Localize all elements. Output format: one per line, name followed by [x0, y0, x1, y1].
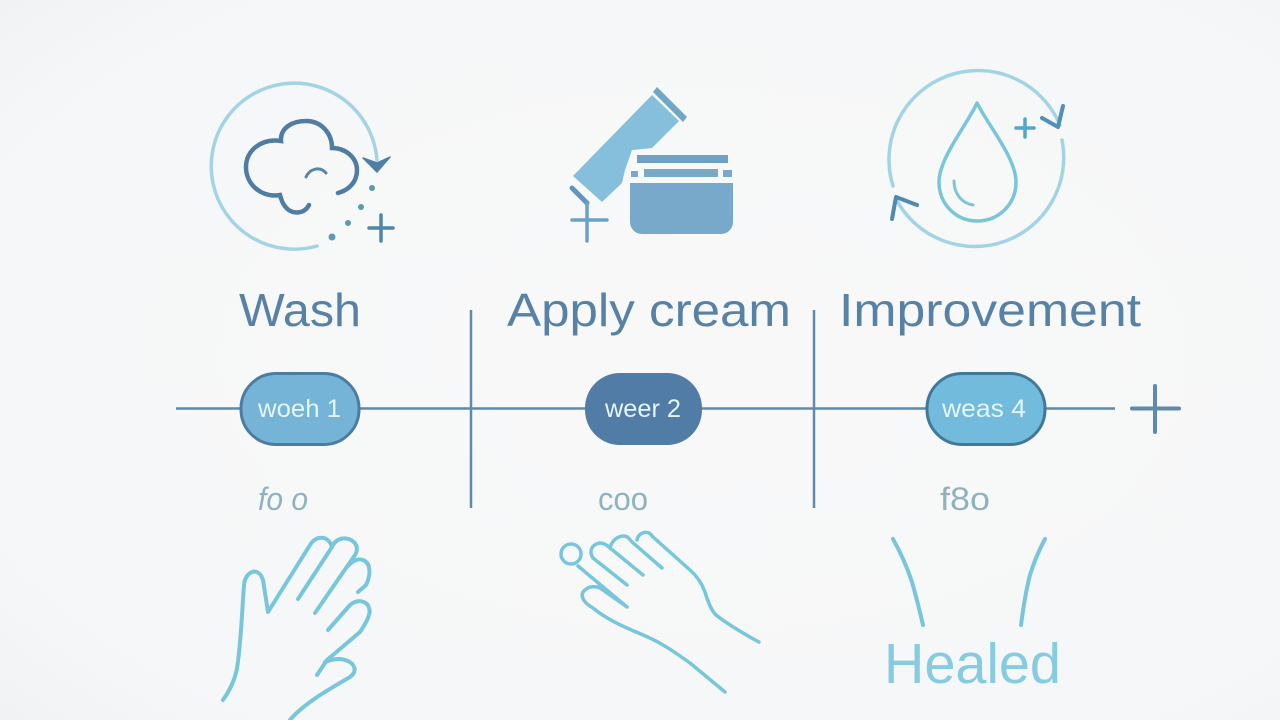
icon: wash cloud with circular arrow — [211, 83, 393, 249]
end plus sign — [1132, 386, 1179, 432]
week 2 pill — [585, 373, 702, 445]
small label 1: fo o — [258, 481, 308, 517]
heading: Improvement: Improvement — [839, 284, 1141, 336]
icon: raised hand — [223, 538, 370, 720]
upper ring arc — [889, 71, 1060, 186]
plus sign — [369, 215, 393, 241]
heading: Wash: Wash — [239, 284, 361, 336]
water drop — [939, 103, 1016, 221]
label: Healed: Healed — [884, 632, 1061, 696]
cloud outline — [246, 121, 357, 212]
nozzle plus — [572, 203, 607, 241]
plus sign — [1016, 119, 1034, 137]
week 1 pill — [241, 374, 359, 444]
tube body — [573, 95, 679, 202]
circular arrow ring — [211, 83, 377, 249]
tube cap — [653, 87, 687, 122]
week 4 pill — [927, 374, 1045, 444]
jar rim — [631, 169, 732, 177]
small label 2: coo — [598, 481, 648, 517]
week 2 pill: weer 2 — [604, 395, 681, 423]
jar body — [630, 183, 733, 234]
cloud highlight — [306, 169, 326, 177]
droplets — [328, 185, 375, 240]
icon: water drop with cycle arrows — [889, 71, 1064, 247]
arrowhead — [363, 157, 390, 172]
icon: healed skin lines — [893, 539, 1045, 625]
timeline axis — [176, 310, 1115, 508]
jar lid top — [637, 155, 728, 163]
upper arrowhead — [1042, 106, 1063, 127]
tube nozzle — [572, 188, 587, 203]
small label 3: f8o — [940, 481, 990, 517]
week 4 pill: weas 4 — [941, 395, 1026, 423]
lower ring arc — [896, 140, 1064, 247]
drop highlight — [954, 181, 973, 205]
icon: cream tube and jar — [572, 87, 733, 241]
icon: pointing hand — [561, 532, 759, 692]
heading: Apply cream: Apply cream — [507, 284, 791, 336]
lower arrowhead — [892, 197, 917, 219]
week 1 pill: woeh 1 — [257, 395, 341, 423]
